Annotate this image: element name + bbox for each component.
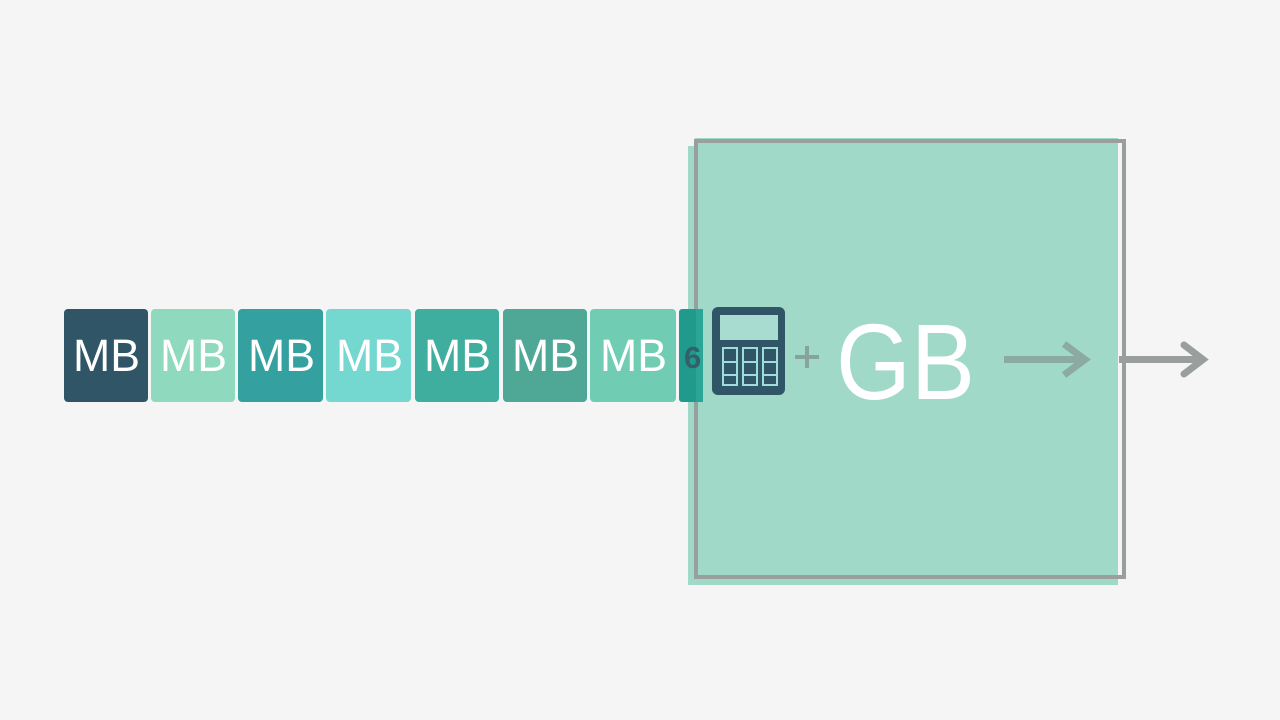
- block: MB 3: MB: [248, 330, 315, 381]
- panel: GB container: [688, 138, 1124, 585]
- block: MB 3: [238, 309, 323, 402]
- row of MB blocks: [64, 309, 676, 402]
- block: MB 7: MB: [600, 330, 667, 381]
- arrow: leaving container: [1119, 345, 1203, 374]
- arrow: inside container: [1004, 344, 1085, 375]
- block: MB 4: MB: [336, 330, 403, 381]
- icon: plus sign: [795, 346, 819, 368]
- block: partially hidden entering tile: [679, 309, 703, 402]
- block: MB 2: MB: [160, 330, 227, 381]
- label: GB: GB: [836, 301, 975, 422]
- block: MB 5: [415, 309, 499, 402]
- block: MB 6: MB: [512, 330, 579, 381]
- block: MB 1: MB: [73, 330, 140, 381]
- icon: calculator: [712, 307, 785, 395]
- block: MB 7: [590, 309, 676, 402]
- block: MB 1: [64, 309, 148, 402]
- block: MB 2: [151, 309, 235, 402]
- block: MB 6: [503, 309, 587, 402]
- block: MB 4: [326, 309, 411, 402]
- block: partially hidden entering tile: 6: [684, 340, 701, 375]
- block: MB 5: MB: [424, 330, 491, 381]
